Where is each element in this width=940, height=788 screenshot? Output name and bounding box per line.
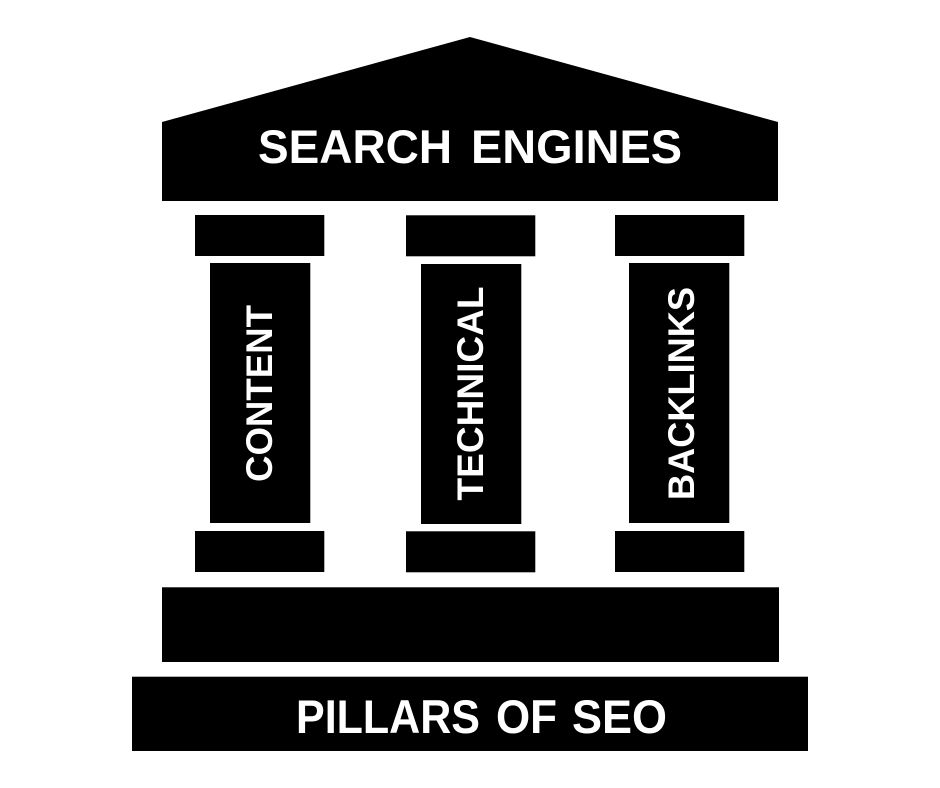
pillar: technical xyxy=(406,215,535,572)
pillar: content: CONTENT xyxy=(238,305,280,482)
lower base: pillars of SEO: OF xyxy=(496,690,557,743)
pillar: backlinks: BACKLINKS xyxy=(660,287,702,500)
pillar: backlinks xyxy=(615,215,744,572)
lower base: pillars of SEO xyxy=(132,677,808,751)
roof: search engines: SEARCH xyxy=(258,120,452,173)
roof: search engines: ENGINES xyxy=(471,120,682,173)
lower base: pillars of SEO: SEO xyxy=(572,690,667,743)
lower base: pillars of SEO: PILLARS xyxy=(296,690,480,743)
pillar: technical: TECHNICAL xyxy=(449,286,491,500)
roof: search engines xyxy=(162,37,778,201)
pillar: content xyxy=(195,215,324,572)
upper base step xyxy=(162,587,779,662)
